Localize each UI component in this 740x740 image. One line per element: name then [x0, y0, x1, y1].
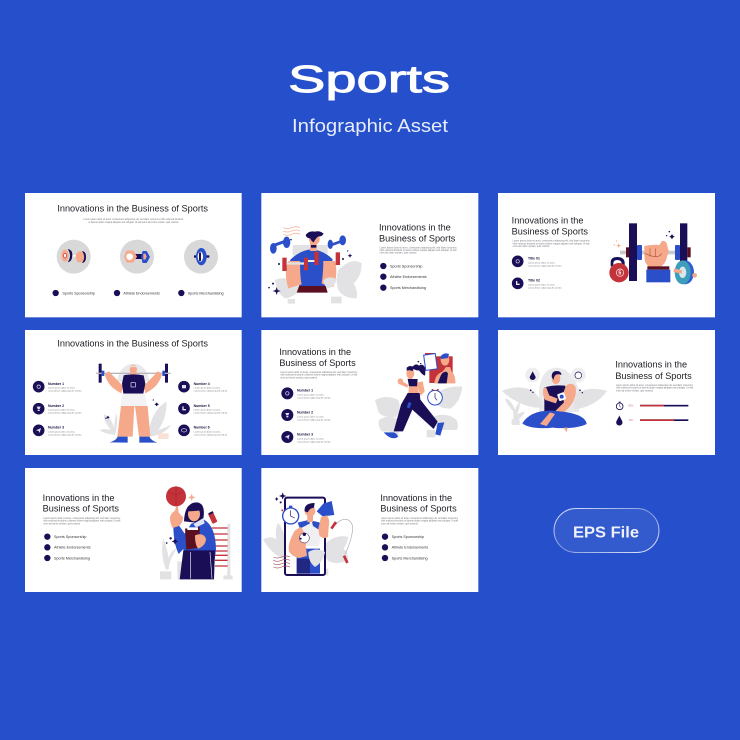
item: number 4: consectetuer adipiscing elit sed do — [194, 390, 228, 393]
illustration: man with dumbbells — [268, 227, 362, 304]
item: number 2: consectetuer adipiscing elit sed do — [48, 412, 82, 415]
intro text: Lorem ipsum dolor sit amet, consectetur adipiscing elit, sed diam nonummy — [616, 384, 694, 387]
intro text: nibh euismod tincidunt ut laoreet dolore magna aliquam erat volutpat. Ut wisi — [513, 242, 590, 245]
list item 2 — [114, 290, 160, 296]
illustration: footballer in phone — [263, 492, 353, 575]
progress: water drop 70%: 70% — [628, 419, 634, 422]
item: number 1: consectetuer adipiscing elit sed do — [297, 396, 331, 399]
icon: weight plate — [184, 240, 218, 274]
illustration: fist lifting barbell: 5 — [618, 271, 621, 277]
icon: hex dumbbell — [120, 240, 154, 274]
intro text: ut laoreet dolore magna aliquam erat volutpat. Ut wisi enim ad minim veniam, quis nostrud — [88, 221, 179, 224]
panel: slide 6 man sitting with progress bars — [498, 330, 715, 455]
list item 1 — [44, 533, 86, 540]
intro text: nibh euismod tincidunt ut laoreet dolore magna aliquam erat volutpat. Ut wisi — [380, 249, 457, 252]
item: title 01: consectetuer adipiscing elit sed do — [528, 265, 562, 268]
progress: water drop 70% — [616, 416, 688, 426]
item: number 2 — [281, 409, 331, 421]
intro text: Lorem ipsum dolor sit amet, consectetur adipiscing elit, sed diam nonummy — [381, 517, 459, 520]
item: number 2: consectetuer adipiscing elit sed do — [297, 418, 331, 421]
list item 3: Sports Merchandising — [188, 291, 224, 295]
item: number 4: Lorem ipsum dolor sit amet, — [194, 387, 221, 390]
item: title 01: Title 01 — [528, 257, 540, 261]
list item 2 — [380, 273, 427, 280]
heading: Innovations in the — [279, 347, 351, 357]
heading: Business of Sports — [512, 226, 588, 236]
list item 3 — [178, 290, 224, 296]
item: number 1: consectetuer adipiscing elit sed do — [48, 390, 82, 393]
intro text: enim ad minim veniam, quis nostrud — [380, 252, 417, 255]
item: number 2: Lorem ipsum dolor sit amet, — [48, 409, 75, 412]
intro text: enim ad minim veniam, quis nostrud — [616, 389, 653, 392]
list item 3 — [382, 555, 428, 561]
heading: Business of Sports — [380, 504, 457, 514]
list item 3: Sports Merchandising — [54, 556, 90, 560]
item: number 3: Number 3 — [297, 432, 313, 436]
item: number 2: Number 2 — [297, 410, 313, 414]
item: number 1: Number 1 — [297, 388, 313, 392]
intro text — [380, 246, 457, 255]
item: number 3: Lorem ipsum dolor sit amet, — [48, 430, 75, 433]
panel: slide 2 man lifting dumbbells — [261, 193, 478, 317]
list item 2: Athlete Endorsements — [123, 291, 160, 295]
intro text — [616, 384, 694, 392]
panel: slide 4 weightlifter — [25, 330, 242, 455]
item: number 3 — [281, 431, 331, 443]
item: number 1 — [33, 381, 82, 393]
badge: EPS File: EPS File — [573, 524, 639, 542]
heading: Innovations in the — [615, 360, 687, 370]
intro text: enim ad minim veniam, quis nostrud — [513, 245, 550, 248]
illustration: man cross-legged — [502, 368, 607, 433]
item: number 1: Lorem ipsum dolor sit amet, — [297, 393, 324, 396]
list item 3: Sports Merchandising — [390, 286, 426, 290]
item: number 6: Number 6 — [194, 426, 210, 430]
list item 3 — [44, 555, 90, 561]
heading: Business of Sports — [279, 358, 356, 368]
item: number 5: Lorem ipsum dolor sit amet, — [194, 409, 221, 412]
item: number 5: consectetuer adipiscing elit sed do — [194, 412, 228, 415]
item: number 2: Lorem ipsum dolor sit amet, — [297, 415, 324, 418]
intro text — [381, 517, 459, 525]
item: number 6 — [178, 424, 228, 436]
heading — [380, 493, 457, 514]
item: title 01 — [512, 255, 562, 268]
list item 2: Athlete Endorsements — [54, 546, 91, 550]
list item 3: Sports Merchandising — [392, 556, 428, 560]
heading: Innovations in the — [380, 493, 452, 503]
intro text: Lorem ipsum dolor sit amet, consectetur adipiscing elit, sed diam nonummy — [280, 371, 358, 374]
illustration: fist lifting barbell — [609, 223, 697, 284]
illustration: weightlifter — [96, 364, 171, 443]
item: number 4 — [178, 381, 228, 393]
illustration: woman spinning basketball — [160, 486, 233, 579]
intro text: Lorem ipsum dolor sit amet, consectetur adipiscing elit, sed diam nonummy — [380, 246, 457, 249]
heading — [279, 347, 356, 368]
list item 1: Sports Sponsorship — [54, 535, 86, 539]
subtitle: Infographic Asset — [292, 116, 448, 136]
list item 1 — [52, 290, 95, 296]
heading: Business of Sports — [379, 234, 456, 244]
heading — [43, 493, 119, 514]
item: number 4: Number 4 — [194, 382, 210, 386]
heading: Business of Sports — [615, 371, 692, 381]
list item 1 — [382, 533, 424, 540]
progress: stopwatch 50%: 50% — [628, 405, 634, 408]
intro text: Lorem ipsum dolor sit amet, consectetur adipiscing elit, sed diam nonummy — [43, 517, 121, 520]
heading: Innovations in the — [512, 215, 583, 225]
item: number 1 — [281, 387, 331, 399]
item: number 3: consectetuer adipiscing elit sed do — [297, 440, 331, 443]
intro text: nibh euismod tincidunt ut laoreet dolore magna aliquam erat volutpat. Ut wisi — [280, 374, 358, 377]
list item 3 — [380, 284, 426, 291]
list item 1 — [380, 263, 422, 269]
intro text: nibh euismod tincidunt ut laoreet dolore magna aliquam erat volutpat. Ut wisi — [43, 520, 121, 523]
item: number 5: Number 5 — [194, 404, 210, 408]
heading — [379, 223, 456, 244]
list item 2: Athlete Endorsements — [392, 546, 428, 550]
heading: Innovations in the — [43, 493, 114, 503]
heading — [512, 215, 588, 236]
item: number 3 — [33, 424, 82, 436]
icon: dumbbell plates — [57, 240, 91, 274]
intro text: Lorem ipsum dolor sit amet, consectetur adipiscing elit, sed diam nonummy — [513, 240, 590, 243]
item: title 02 — [512, 277, 562, 290]
intro text: enim ad minim veniam, quis nostrud — [280, 376, 318, 379]
intro text — [513, 240, 590, 248]
intro text: nibh euismod tincidunt ut laoreet dolore magna aliquam erat volutpat. Ut wisi — [381, 520, 458, 523]
intro text: enim ad minim veniam, quis nostrud — [381, 522, 418, 525]
item: number 5 — [178, 403, 228, 415]
item: title 02: Lorem ipsum dolor sit amet, — [528, 284, 555, 287]
list item 2: Athlete Endorsements — [390, 275, 427, 279]
panel: slide 5 runner — [261, 330, 478, 455]
panel: slide 8 footballer on phone — [261, 468, 478, 592]
heading: Innovations in the Business of Sports — [57, 204, 208, 214]
main title: Sports — [288, 59, 450, 101]
item: number 2: Number 2 — [48, 404, 64, 408]
item: number 3: Number 3 — [48, 426, 64, 430]
item: number 1: Lorem ipsum dolor sit amet, — [48, 387, 75, 390]
list item 1: Sports Sponsorship — [390, 264, 422, 268]
list item 1: Sports Sponsorship — [62, 291, 95, 295]
item: title 01: Lorem ipsum dolor sit amet, — [528, 262, 555, 265]
item: number 3: consectetuer adipiscing elit sed do — [48, 433, 82, 436]
intro text — [43, 517, 121, 525]
intro text — [83, 218, 184, 224]
item: title 02: consectetuer adipiscing elit sed do — [528, 287, 562, 290]
illustration: woman running — [375, 353, 462, 438]
item: title 02: Title 02 — [528, 279, 540, 283]
list item 1: Sports Sponsorship — [392, 535, 424, 539]
intro text: enim ad minim veniam, quis nostrud — [43, 522, 81, 525]
intro text — [280, 371, 358, 379]
item: number 6: consectetuer adipiscing elit sed do — [194, 433, 228, 436]
heading: Innovations in the — [379, 223, 451, 233]
intro text: Lorem ipsum dolor sit amet, consectetur adipiscing elit, sed diam nonummy nibh euismod tincidunt — [83, 218, 184, 221]
heading: Business of Sports — [43, 504, 119, 514]
intro text: nibh euismod tincidunt ut laoreet dolore magna aliquam erat volutpat. Ut wisi — [616, 387, 693, 390]
panel: slide 3 barbell and fist — [498, 193, 715, 317]
item: number 2 — [33, 403, 82, 415]
item: number 3: Lorem ipsum dolor sit amet, — [297, 437, 324, 440]
heading: Innovations in the Business of Sports — [57, 339, 208, 349]
progress: stopwatch 50% — [616, 402, 688, 410]
list item 2 — [382, 544, 428, 550]
item: number 6: Lorem ipsum dolor sit amet, — [194, 430, 221, 433]
badge: EPS File — [554, 508, 659, 552]
panel: slide 7 woman with basketball — [25, 468, 242, 592]
heading — [615, 360, 692, 381]
item: number 1: Number 1 — [48, 382, 64, 386]
list item 2 — [44, 544, 91, 550]
panel: slide 1 three icons — [25, 193, 242, 317]
